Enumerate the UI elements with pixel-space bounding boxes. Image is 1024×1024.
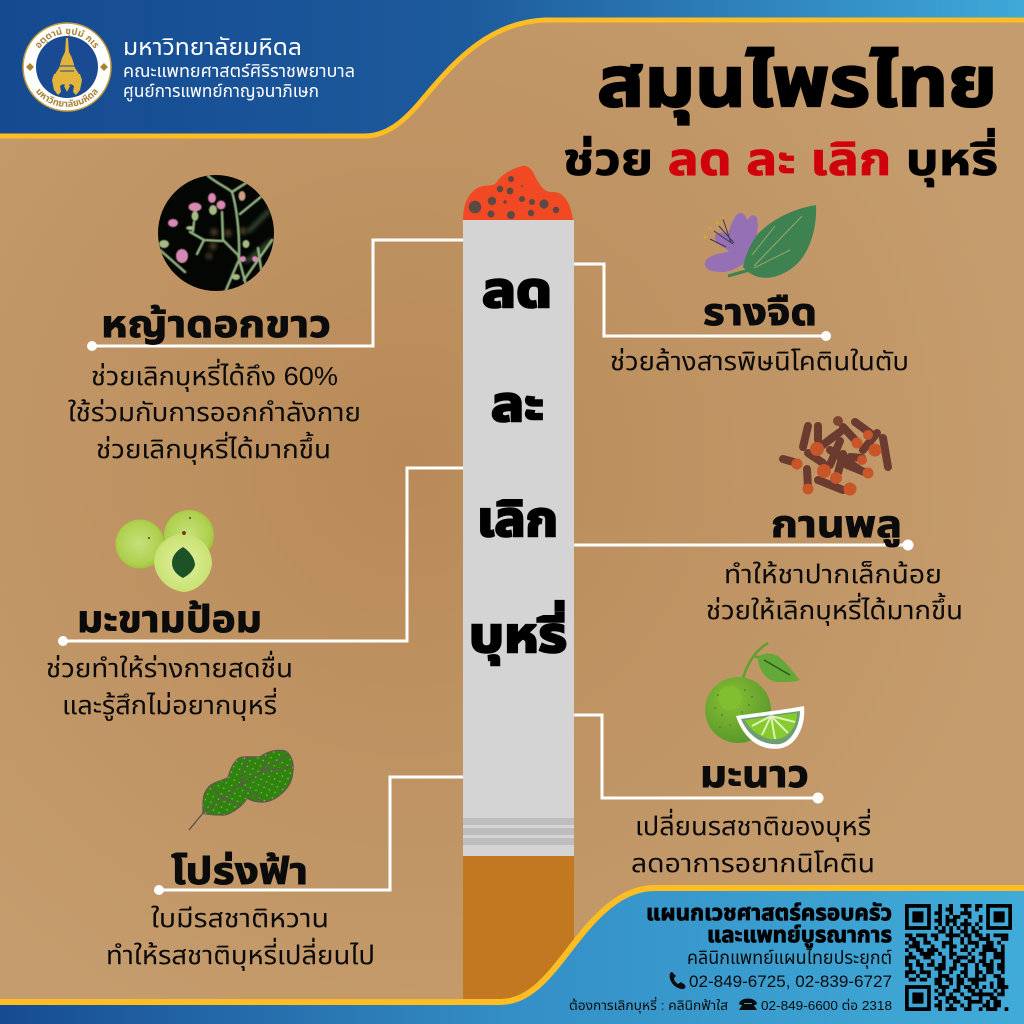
description: และรู้สึกไม่อยากบุหรี่: [62, 687, 277, 721]
cigarette: [463, 166, 574, 1002]
description: ช่วยทำให้ร่างกายสดชื่น: [46, 650, 293, 683]
title: ช่วย ลด ละ เลิก บุหรี่: [563, 128, 998, 187]
description: ใช้ร่วมกับการออกกำลังกาย: [68, 397, 361, 427]
icon: amla fruit: [116, 510, 214, 592]
heading: กานพลู: [771, 504, 902, 547]
seal ring text: อตฺตานํ ชุปมํ กเร: [36, 27, 98, 48]
item: Manao: [631, 643, 875, 878]
description: ช่วยล้างสารพิษนิโคตินในตับ: [610, 346, 909, 376]
footer contact text: คลินิกแพทย์แผนไทยประยุกต์: [687, 948, 892, 969]
description: ช่วยเลิกบุหรี่ได้ถึง 60%: [91, 358, 338, 392]
heading: หญ้าดอกขาว: [101, 304, 331, 345]
footer contact text: [569, 900, 892, 1013]
footer contact text: 02-849-6600 ต่อ 2318: [761, 998, 892, 1013]
description: [46, 650, 293, 721]
item: Rang Chuet: [610, 205, 909, 376]
description: ลดอาการอยากนิโคติน: [631, 848, 875, 878]
footer contact text: และแพทย์บูรณาการ: [707, 922, 892, 948]
header text: institution: [123, 34, 355, 103]
connector lines: [58, 240, 914, 895]
description: [631, 808, 875, 878]
cigarette filter: [463, 856, 574, 1002]
icon: flower photo: [158, 175, 274, 291]
heading: มะขามป้อม: [77, 599, 262, 640]
description: เปลี่ยนรสชาติของบุหรี่: [635, 808, 871, 842]
seal crest: [52, 38, 82, 95]
description: ช่วยเลิกบุหรี่ได้มากขึ้น: [96, 431, 331, 465]
header text: institution: มหาวิทยาลัยมหิดล: [123, 34, 302, 60]
header text: institution: คณะแพทยศาสตร์ศิริราชพยาบาล: [123, 61, 355, 81]
cigarette words: เลิก: [477, 493, 558, 547]
icon: speckled leaf: [189, 750, 293, 830]
icon: cloves: [783, 416, 888, 496]
icon: purple flower and green leaf: [704, 205, 816, 278]
item: Ya Dok Khao: [68, 175, 361, 465]
logo: Mahidol University seal: [22, 22, 112, 112]
footer contact text: ต้องการเลิกบุหรี่ : คลินิกฟ้าใส: [569, 996, 728, 1013]
description: ใบมีรสชาติหวาน: [151, 903, 329, 933]
icon: mobile phone: [670, 972, 685, 989]
title: [563, 43, 998, 187]
footer contact text: แผนกเวชศาสตร์ครอบครัว: [646, 900, 892, 925]
item: Makham Pom: [46, 510, 293, 721]
header banner: [0, 0, 1024, 136]
footer panel: [0, 888, 1024, 1024]
cigarette words: [469, 264, 567, 665]
icon: desk telephone: [739, 998, 757, 1010]
logo: Mahidol University seal: มหาวิทยาลัยมหิดล: [36, 88, 98, 107]
title: สมุนไพรไทย: [597, 43, 997, 124]
description: [706, 559, 963, 626]
description: ช่วยให้เลิกบุหรี่ได้มากขึ้น: [706, 592, 963, 626]
QR code: [905, 904, 1012, 1009]
footer contact text: 02-849-6725, 02-839-6727: [689, 972, 892, 991]
cigarette words: ลด: [482, 264, 552, 318]
description: ทำให้ชาปากเล็กน้อย: [724, 559, 942, 589]
icon: lime: [705, 643, 804, 749]
item: Kanphlu: [706, 416, 963, 626]
header text: institution: ศูนย์การแพทย์กาญจนาภิเษก: [123, 81, 319, 103]
heading: รางจืด: [703, 292, 817, 333]
cigarette words: ละ: [491, 378, 544, 432]
description: ทำให้รสชาติบุหรี่เปลี่ยนไป: [106, 937, 375, 971]
description: [106, 903, 375, 971]
heading: โปร่งฟ้า: [171, 851, 308, 892]
cigarette words: บุหรี่: [469, 601, 567, 665]
item: Prong Fa: [106, 750, 375, 971]
description: [68, 358, 361, 465]
cigarette body: [463, 220, 574, 857]
heading: มะนาว: [700, 754, 809, 795]
cigarette burning tip: [463, 166, 573, 220]
